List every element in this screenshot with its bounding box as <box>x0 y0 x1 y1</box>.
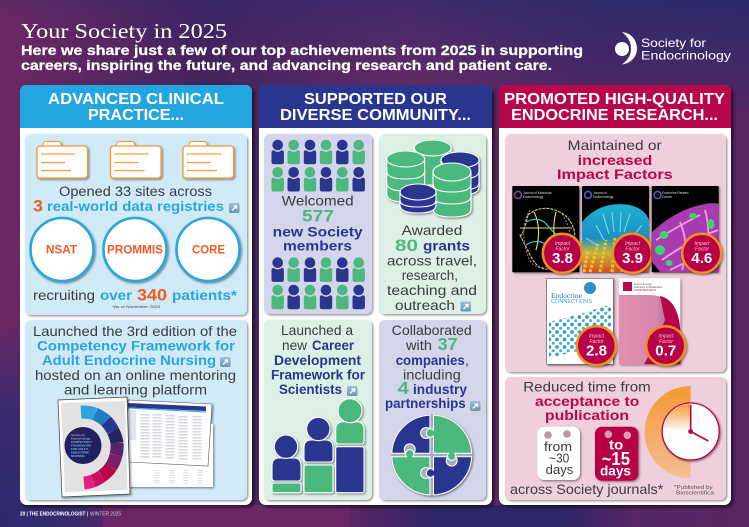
text: collaborated with 37 companies: companies <box>396 352 465 368</box>
panel: advanced clinical practice <box>20 85 252 505</box>
text: recruiting patients: 340 <box>137 286 167 304</box>
text: collaborated with 37 companies: industry <box>413 381 467 397</box>
text: across society journals: across Society journals* <box>510 481 664 497</box>
icon: folders <box>37 142 234 178</box>
tag: from ~30 days: from <box>544 439 572 454</box>
badge: impact factor 2.8: Impact <box>589 334 604 340</box>
text: awarded 80 grants: teaching and <box>387 282 477 298</box>
badge: impact factor 0.7: Factor <box>659 339 674 345</box>
card: impact factors <box>505 134 726 372</box>
text: launched the 3rd edition: Adult Endocrine Nursing <box>42 352 216 368</box>
text: welcomed 577 new society members: 577 <box>302 207 334 226</box>
journal cover: Journal of Molecular Endocrinology: Endocrinology <box>523 195 544 199</box>
journal cover: Endocrinology, Diabetes & Metabolism Case Reports: CASE REPORTS <box>634 288 656 292</box>
heading: promoted research: PROMOTED HIGH-QUALITY <box>504 91 726 108</box>
image: framework documents: Society for <box>71 433 85 437</box>
heading: supported our diverse community: DIVERSE COMMUNITY... <box>280 107 471 124</box>
icon: people rows top <box>272 140 365 192</box>
badge: impact factor 3.9: 3.9 <box>622 251 643 267</box>
logo: Society for Endocrinology <box>615 32 731 64</box>
journal cover: Endocrine Connections: CONNECTIONS <box>551 299 592 305</box>
image: framework documents: FRAMEWORK <box>71 444 92 448</box>
text: recruiting patients: recruiting <box>33 287 95 303</box>
card: career development framework <box>264 320 372 500</box>
journal cover: Journal of Endocrinology: Endocrinology <box>593 195 614 199</box>
text: awarded 80 grants: Awarded <box>402 222 462 238</box>
journal cover: Journal of Endocrinology <box>582 186 652 273</box>
journal cover: Endocrine Connections: Endocrine <box>551 291 583 300</box>
card: new members <box>264 134 372 314</box>
journal cover: Endocrinology, Diabetes & Metabolism Case Reports: Diabetes & Metabolism <box>634 285 663 289</box>
journal cover: Endocrine-Related Cancer: Cancer <box>662 195 673 199</box>
image: framework documents: Endocrinology: <box>71 436 91 440</box>
heading: promoted research: ENDOCRINE RESEARCH... <box>511 107 718 124</box>
text: collaborated with 37 companies: Collaborated <box>392 322 472 338</box>
badge: impact factor 4.6 <box>682 234 721 273</box>
text: reduced time from acceptance to publication <box>523 379 651 423</box>
journal cover: Journal of Molecular Endocrinology <box>512 186 582 273</box>
card: reduced publication time <box>505 377 726 500</box>
card: data registries <box>25 134 247 315</box>
text: recruiting patients <box>33 286 238 309</box>
icon: people rows bottom <box>272 257 365 309</box>
tag: from ~30 days: ~30 <box>549 451 569 466</box>
text: collaborated with 37 companies <box>385 322 480 411</box>
text: maintained or increased impact factors: Maintained or <box>568 137 662 153</box>
text: collaborated with 37 companies: with <box>405 337 432 353</box>
text: welcomed 577 new society members: Welcomed <box>282 193 354 209</box>
text: awarded 80 grants: outreach <box>395 297 455 313</box>
text: awarded 80 grants: research, <box>402 267 458 283</box>
badge: impact factor 2.8: Factor <box>590 339 605 345</box>
footnote: published by bioscientifica: Bioscientifica <box>676 491 714 497</box>
badge: impact factor 2.8: 2.8 <box>586 344 607 360</box>
text: reduced time from acceptance to publication: acceptance to <box>535 393 639 409</box>
footer: WINTER 2025 <box>90 512 121 518</box>
text: awarded 80 grants <box>387 222 477 313</box>
badge: impact factor 3.8 <box>543 234 582 273</box>
card: competency framework <box>25 320 247 500</box>
text: launched a new career development framework: Launched a <box>281 322 353 338</box>
card: grants <box>379 134 486 314</box>
text: opened 33 sites: real-world data registries <box>47 198 224 214</box>
text: recruiting patients: patients* <box>172 287 238 303</box>
text: recruiting patients: *As of November 2025 <box>112 304 161 309</box>
text: collaborated with 37 companies: 4 <box>398 378 409 398</box>
image: framework documents: FOR ADULT <box>71 447 88 451</box>
logo: Society for Endocrinology: Endocrinology <box>641 48 731 62</box>
donut chart cover art <box>81 412 117 483</box>
text: welcomed 577 new society members: new Society <box>273 224 363 240</box>
text: welcomed 577 new society members <box>273 193 363 254</box>
registry badges: NSAT <box>46 244 77 256</box>
text: opened 33 sites: 3 <box>33 196 43 216</box>
image: framework documents: COMPETENCY <box>71 440 92 444</box>
text: collaborated with 37 companies: including <box>403 366 461 382</box>
text: welcomed 577 new society members: members <box>283 238 352 254</box>
heading: advanced clinical practice <box>20 85 252 128</box>
text: launched a new career development framework: Framework for <box>271 366 366 382</box>
journal cover: Endocrine-Related Cancer: Endocrine-Related <box>662 191 689 195</box>
text: launched a new career development framework: Development <box>274 352 361 368</box>
journal cover: Endocrinology, Diabetes & Metabolism Case Reports: Endocrinology, <box>634 282 653 286</box>
heading: supported our diverse community <box>259 85 492 128</box>
text: launched the 3rd edition: hosted on an online mentoring <box>35 367 236 383</box>
text: launched a new career development framework: Career <box>312 337 355 353</box>
badge: impact factor 0.7: Impact <box>658 334 674 340</box>
image: framework documents <box>58 397 213 497</box>
text: launched a new career development framework: new <box>282 337 308 353</box>
text: awarded 80 grants: across travel, <box>387 253 477 269</box>
tag: from ~30 days: days <box>546 462 574 477</box>
tag: to ~15 days: ~15 <box>602 449 630 469</box>
text: reduced time from acceptance to publication: Reduced time from <box>523 379 651 395</box>
image: framework documents: NURSING <box>71 454 86 458</box>
text: opened 33 sites: Opened 33 sites across <box>59 183 212 199</box>
tag: to ~15 days <box>595 427 638 481</box>
text: collaborated with 37 companies: 37 <box>438 334 458 354</box>
heading: advanced clinical practice: PRACTICE... <box>88 107 184 124</box>
badge: impact factor 3.9: Factor <box>626 247 641 253</box>
badge: impact factor 0.7: 0.7 <box>655 344 676 360</box>
text: collaborated with 37 companies: , <box>465 352 469 368</box>
registry badges: PROMMIS <box>107 244 163 256</box>
badge: impact factor 4.6: 4.6 <box>691 251 712 267</box>
title: Your Society in 2025 <box>21 19 227 43</box>
text: awarded 80 grants: grants <box>423 238 470 254</box>
icon: people on podiums <box>272 399 364 493</box>
tag: to ~15 days: days <box>600 463 631 479</box>
text: collaborated with 37 companies: partnerships <box>385 395 466 411</box>
badge: impact factor 0.7 <box>646 326 685 365</box>
subtitle: Here we share just a few of our top achievements from 2025 in supporting <box>21 42 583 58</box>
card: collaborations <box>379 320 486 500</box>
badge: impact factor 4.6: Impact <box>694 241 710 247</box>
text: launched the 3rd edition <box>33 323 237 398</box>
tag: from ~30 days <box>537 427 580 480</box>
text: awarded 80 grants: 80 <box>395 236 418 255</box>
panel: promoted high-quality endocrine research <box>499 85 731 505</box>
text: reduced time from acceptance to publication: publication <box>545 407 629 423</box>
badge: impact factor 3.8: Impact <box>555 241 570 247</box>
badge: impact factor 4.6: Factor <box>695 247 710 253</box>
journal cover: Journal of Molecular Endocrinology: Journal of Molecular <box>523 191 553 195</box>
tag: to ~15 days: to <box>609 436 623 452</box>
text: maintained or increased impact factors: Impact Factors <box>557 166 673 182</box>
footnote: published by bioscientifica <box>674 485 714 497</box>
badge: impact factor 2.8 <box>577 326 616 365</box>
heading: advanced clinical practice: ADVANCED CLINICAL <box>48 91 224 108</box>
text: launched a new career development framework: Scientists <box>279 381 342 397</box>
subtitle <box>21 42 583 73</box>
icon: clock <box>645 386 719 478</box>
badge: impact factor 3.8: 3.8 <box>552 251 573 267</box>
text: launched the 3rd edition: and learning platform <box>64 382 207 398</box>
text: opened 33 sites <box>33 183 240 216</box>
text: launched the 3rd edition: Competency Framework for <box>37 338 236 354</box>
journal cover: Endocrinology, Diabetes & Metabolism Case Reports <box>619 278 685 365</box>
badge: impact factor 3.9: Impact <box>625 241 640 247</box>
badge: impact factor 3.9 <box>613 234 652 273</box>
registry badges <box>30 218 240 281</box>
text: maintained or increased impact factors <box>557 137 673 182</box>
icon: coin stacks <box>387 140 479 217</box>
footnote: published by bioscientifica: *Published by <box>674 485 713 491</box>
text: launched a new career development framework <box>271 322 366 397</box>
icon: puzzle <box>391 414 472 496</box>
panel: supported our diverse community <box>259 85 492 505</box>
registry badges: CORE <box>192 244 225 256</box>
text: maintained or increased impact factors: increased <box>578 152 652 168</box>
journal cover: Journal of Endocrinology: Journal of <box>593 191 607 195</box>
heading: promoted research <box>499 85 731 128</box>
heading: supported our diverse community: SUPPORTED OUR <box>304 91 447 108</box>
image: framework documents: ENDOCRINE <box>71 450 89 454</box>
journal cover: Endocrine-Related Cancer <box>652 186 721 273</box>
badge: impact factor 3.8: Factor <box>556 247 571 253</box>
journal cover: Endocrine Connections <box>547 278 616 365</box>
text: launched the 3rd edition: Launched the 3rd edition of the <box>33 323 237 339</box>
footer: 20 | THE ENDOCRINOLOGIST | <box>20 512 88 518</box>
subtitle: careers, inspiring the future, and advancing research and patient care. <box>21 57 552 73</box>
logo: Society for Endocrinology: Society for <box>641 36 706 50</box>
text: recruiting patients: over <box>100 287 133 303</box>
